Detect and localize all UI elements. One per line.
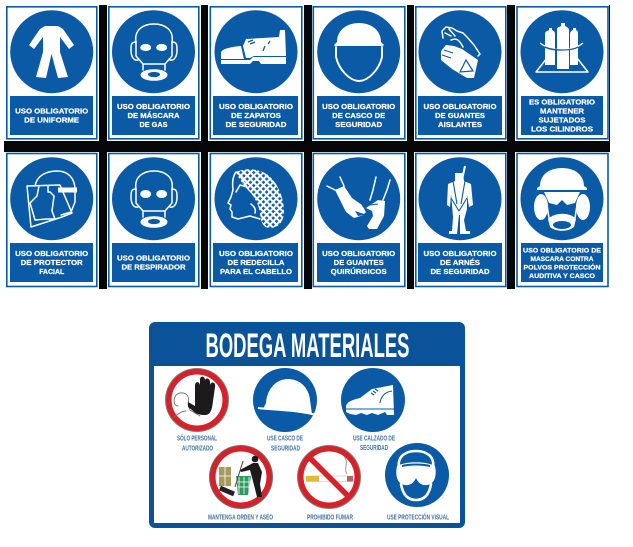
panel: bodega materiales: [149, 322, 465, 528]
icon: protección visual: [385, 443, 449, 507]
sign: uniforme: [4, 5, 99, 141]
sign: máscara, protección auditiva y casco: USO OBLIGATORIO DE: [523, 247, 601, 254]
sign: máscara de gas: DE GAS: [140, 120, 168, 129]
label: mantenga orden y aseo: MANTENGA ORDEN Y ASEO: [208, 512, 273, 522]
sign: casco: DE CASCO DE: [332, 111, 385, 120]
sign: guantes aislantes: DE GUANTES: [435, 111, 485, 120]
sign: máscara, protección auditiva y casco: MASCARA CONTRA: [530, 256, 594, 263]
sign: máscara de gas: [107, 5, 201, 141]
sign: máscara de gas: USO OBLIGATORIO: [117, 102, 190, 111]
title: BODEGA MATERIALES: [206, 327, 410, 365]
sign: uniforme: DE UNIFORME: [24, 116, 79, 124]
icon: gas cylinders: [536, 23, 588, 72]
sign: uniforme: USO OBLIGATORIO: [15, 106, 89, 116]
label: use protección visual: USE PROTECCIÓN VISUAL: [387, 512, 449, 522]
sign: zapatos: DE SEGURIDAD: [226, 120, 286, 129]
sign: protector facial: USO OBLIGATORIO: [15, 249, 89, 258]
label: sólo personal autorizado: AUTORIZADO: [182, 444, 213, 452]
sign: guantes aislantes: [414, 5, 507, 141]
icon: helmet, ear muffs and mask: [534, 168, 590, 231]
sign: casco: [312, 5, 407, 141]
icon: hair net: [228, 169, 284, 228]
sign: zapatos: [208, 5, 304, 141]
sign: cilindros: SUJETADOS: [538, 116, 586, 125]
label: use casco: SEGURIDAD: [271, 444, 300, 452]
sign: protector facial: DE PROTECTOR: [21, 258, 83, 267]
sign: casco: USO OBLIGATORIO: [322, 102, 396, 111]
sign: arnés: DE SEGURIDAD: [430, 267, 490, 276]
sign: cilindros: [515, 5, 609, 141]
label: use calzado: [353, 434, 395, 452]
sign: guantes quirúrgicos: [312, 152, 407, 289]
sign: guantes quirúrgicos: QUIRÚRGICOS: [331, 267, 387, 276]
sign: máscara, protección auditiva y casco: AUDITIVA Y CASCO: [529, 273, 595, 280]
sign: respirador: [107, 152, 201, 289]
label: use casco: USE CASCO DE: [267, 434, 303, 442]
icon: harness worker: [447, 166, 473, 234]
label: prohibido fumar: PROHIBIDO FUMAR: [307, 512, 354, 522]
icon: blue boot: [341, 368, 405, 432]
sign: cilindros: ES OBLIGATORIO: [529, 98, 595, 107]
sign: respirador: DE RESPIRADOR: [122, 262, 186, 272]
icon: face shield: [27, 171, 77, 227]
sign: arnés: USO OBLIGATORIO: [424, 249, 497, 258]
sign: cilindros: MANTENER: [540, 107, 585, 116]
icon: insulating gloves: [441, 27, 480, 78]
icon: stop hand: [165, 368, 229, 432]
sign: máscara, protección auditiva y casco: [515, 152, 609, 289]
sign: casco: SEGURIDAD: [335, 120, 382, 129]
sign: máscara de gas: DE MÁSCARA: [128, 111, 180, 120]
sign: cilindros: LOS CILINDROS: [531, 124, 593, 133]
sign: protector facial: FACIAL: [39, 267, 65, 276]
sign: redecilla: USO OBLIGATORIO: [219, 249, 293, 258]
label: sólo personal autorizado: [177, 434, 217, 452]
label: use calzado: SEGURIDAD: [360, 443, 388, 452]
sign: guantes quirúrgicos: DE GUANTES: [334, 258, 384, 267]
icon: prohibido fumar: [297, 445, 361, 509]
icon: blue helmet: [253, 368, 317, 432]
sign: zapatos: DE ZAPATOS: [231, 111, 281, 120]
icon: orden y aseo: [209, 445, 273, 509]
icon: helmet and head: [334, 23, 384, 81]
sign: respirador: USO OBLIGATORIO: [117, 254, 190, 262]
sign: guantes aislantes: USO OBLIGATORIO: [424, 102, 497, 111]
black backing of sign grid: [4, 5, 610, 289]
sign: redecilla: [208, 152, 304, 289]
sign: guantes aislantes: AISLANTES: [438, 120, 482, 129]
icon: respirator: [131, 171, 177, 228]
icon: coverall: [29, 26, 74, 78]
label: sólo personal autorizado: SÓLO PERSONAL: [177, 434, 217, 442]
icon: gas mask: [131, 24, 177, 81]
sign: redecilla: PARA EL CABELLO: [220, 267, 292, 276]
label: use calzado: USE CALZADO DE: [353, 434, 395, 442]
icon: safety boot: [221, 30, 286, 64]
sign: arnés: [414, 152, 507, 289]
icon: surgical gloves: [327, 177, 390, 229]
sign: protector facial: [4, 152, 99, 289]
label: use casco: [267, 434, 303, 452]
sign: arnés: DE ARNÉS: [440, 258, 480, 267]
sign: guantes quirúrgicos: USO OBLIGATORIO: [322, 249, 396, 258]
sign: zapatos: USO OBLIGATORIO: [219, 102, 293, 111]
sign: máscara, protección auditiva y casco: POLVOS PROTECCIÓN: [524, 262, 601, 272]
sign: redecilla: DE REDECILLA: [228, 258, 285, 267]
